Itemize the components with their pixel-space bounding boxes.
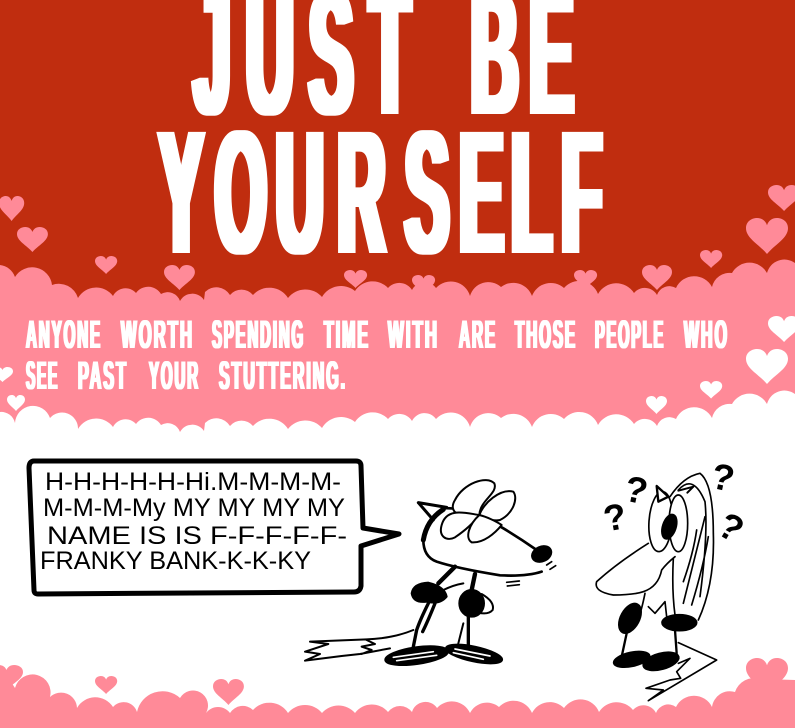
bottom hearts [0,658,788,705]
body text: STUTTERING. [219,354,347,398]
bottom pink band [0,665,795,728]
speech text: H-H-H-H-H-Hi.M-M-M-M- [45,468,341,496]
infographic canvas: WHO [684,313,729,357]
question marks: ? [600,495,629,540]
fox speaking [305,480,556,668]
question marks [600,455,751,551]
fox confused [596,455,751,701]
speech bubble [29,461,399,594]
speech text: M-M-M-My MY MY MY MY [43,494,345,522]
body text: ANYONE [26,313,102,357]
body text: WORTH [121,313,194,357]
title: just be yourself: YOURSELF [159,95,602,291]
body text: PEOPLE [595,313,665,357]
question marks: ? [621,468,651,512]
body text: SPENDING [212,313,305,357]
body text: PAST [78,354,128,398]
body text: SEE [26,354,59,398]
pink hearts on red [0,185,795,293]
question marks: ? [711,504,751,551]
red header background [0,0,795,320]
pink band [0,260,795,450]
body text [26,313,729,398]
white comic area [0,391,795,728]
speech text: FRANKY BANK-K-K-KY [40,547,311,575]
body text: THOSE [515,313,577,357]
body text: YOUR [149,354,200,398]
body text: WITH [388,313,439,357]
white hearts on pink [0,316,795,414]
title: just be yourself [159,0,602,291]
speech text [40,468,347,575]
question marks: ? [708,455,738,500]
speech text: NAME IS IS F-F-F-F-F- [47,522,347,550]
body text: TIME [324,313,370,357]
body text: ARE [459,313,497,357]
